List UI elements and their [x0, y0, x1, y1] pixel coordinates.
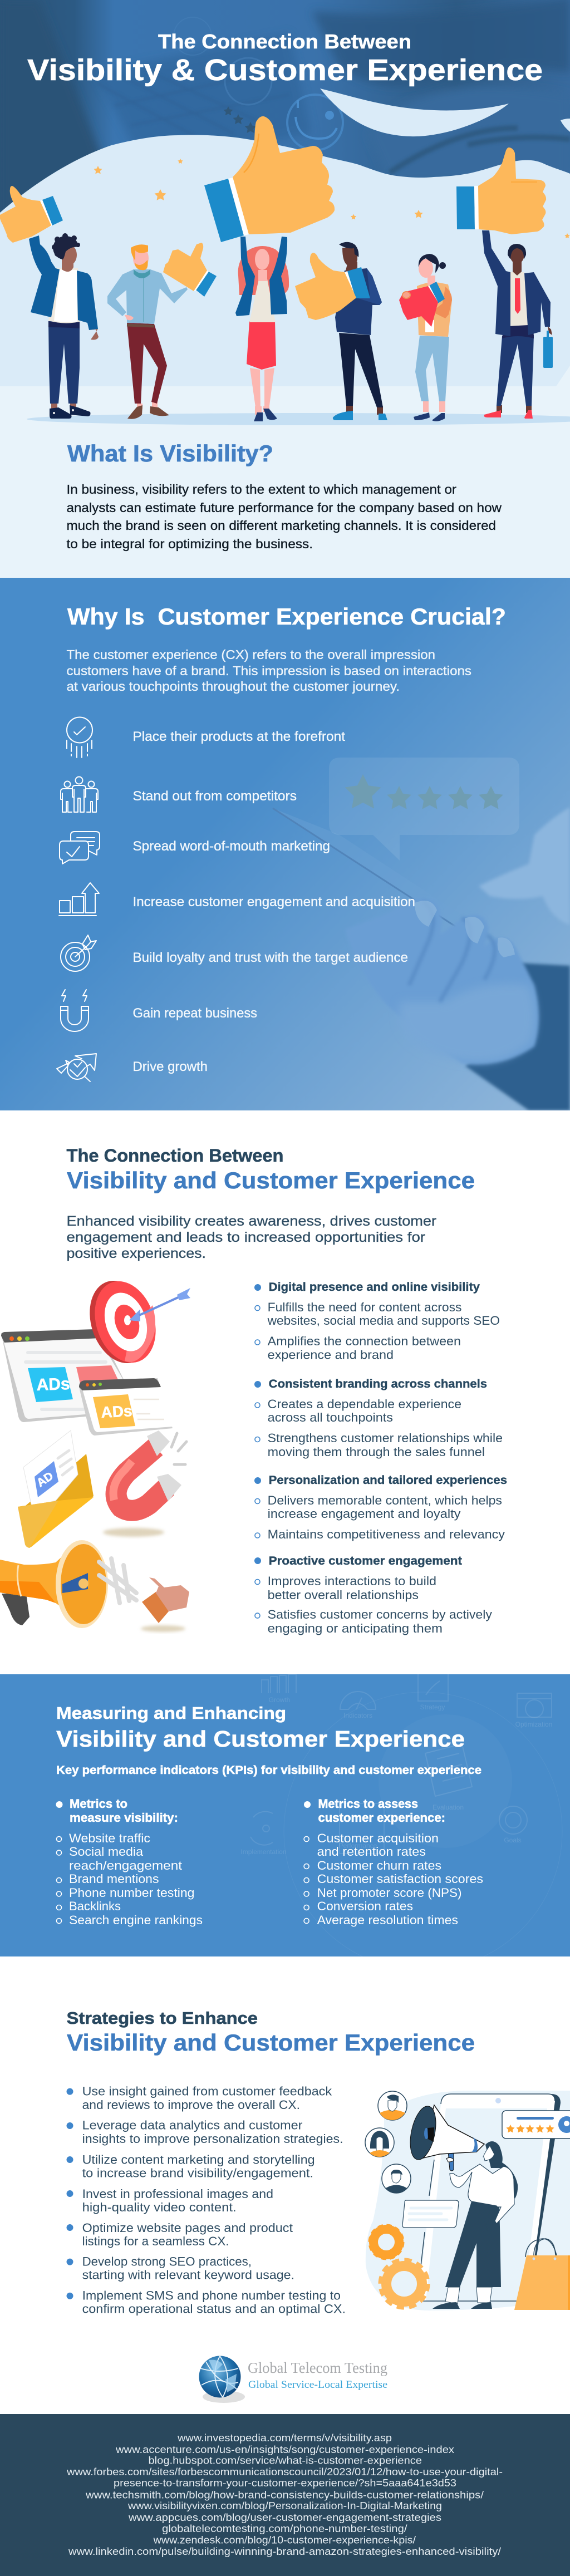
megaphone [406, 2104, 484, 2171]
panel: sources footer: www.investopedia.com/terms/v/visibility.asp [177, 2432, 392, 2444]
heading: connection: The Connection Between [67, 1146, 283, 1166]
faint background icons: Optimization [515, 1720, 552, 1728]
floor [0, 366, 570, 578]
panel: why customer experience is crucial [0, 578, 570, 1110]
faint background icons: Growth [269, 1696, 290, 1704]
person 1 with thumb up [0, 186, 99, 419]
icon: growth bars [59, 883, 99, 916]
light wave backdrop [0, 135, 570, 386]
small browser window with ad [79, 1378, 173, 1436]
text: engagement: Increase customer engagement and acquisition [132, 894, 415, 910]
heading: what is visibility: What Is Visibility? [67, 440, 273, 466]
light swoosh [320, 89, 509, 136]
text: drive growth: Drive growth [132, 1059, 208, 1074]
small browser window with ad: ADs [101, 1402, 132, 1421]
illustration: woman with megaphone and phone [365, 2091, 570, 2310]
text: loyalty: Build loyalty and trust with the target audience [132, 950, 408, 965]
list: metrics to measure visibility: Search engine rankings [69, 1913, 203, 1927]
woman [433, 2141, 518, 2309]
heading: strategies: Visibility and Customer Experience [67, 2029, 475, 2056]
list: metrics to assess customer experience: Conversion rates [317, 1899, 413, 1913]
list: metrics to assess customer experience: Customer churn rates [317, 1859, 441, 1872]
faint background icons: Evaluation [433, 1803, 464, 1811]
list: digital presence [254, 1281, 500, 1361]
list: consistent branding [254, 1378, 503, 1459]
person 5 with thumb down [399, 254, 452, 421]
list: strategies: starting with relevant keyword usage. [82, 2268, 294, 2282]
text block: visibility definition: much the brand is seen on different marketing channels. It is considered [67, 518, 496, 533]
panel: sources footer: www.visibilityvixen.com/blog/Personalization-In-Digital-Marketing [127, 2500, 442, 2511]
list: metrics to measure visibility: Phone number testing [69, 1886, 195, 1900]
background photo: hand holding phone [273, 807, 570, 1110]
faint background icons: Goals [504, 1836, 522, 1844]
list: personalization: Maintains competitiveness and relevancy [268, 1527, 505, 1541]
stars [94, 159, 570, 238]
panel: connection between visibility and customer experience [0, 1110, 570, 1674]
list: digital presence: Amplifies the connection between [268, 1334, 461, 1348]
list: proactive engagement: Improves interactions to build [268, 1574, 436, 1588]
panel: header and what is visibility [0, 0, 570, 578]
list: strategies: to increase brand visibility/engagement. [82, 2166, 313, 2180]
logo: global telecom testing: Global Telecom Testing [248, 2359, 387, 2376]
text block: customer experience definition: at various touchpoints throughout the customer journey. [67, 679, 400, 694]
faint background icons: Strategy [420, 1703, 445, 1711]
icon: speech bubbles [60, 832, 100, 864]
list: strategies: insights to improve personalization strategies. [82, 2132, 343, 2146]
icon: target with arrow [61, 935, 96, 971]
faint background icons: Indicators [343, 1712, 372, 1719]
title: Visibility & Customer Experience [27, 53, 543, 87]
list: metrics to measure visibility: Social media [69, 1845, 144, 1859]
small swoosh at right [561, 119, 570, 132]
list: strategies [67, 2084, 346, 2316]
panel: sources footer: www.accenture.com/us-en/insights/song/customer-experience-index [115, 2444, 454, 2455]
text block: visibility definition: In business, visibility refers to the extent to which management or [67, 482, 456, 496]
list: strategies: Invest in professional images and [82, 2187, 273, 2201]
panel: sources footer: www.forbes.com/sites/forbescommunicationscouncil/2023/01/12/how-to-use-your-digital- [66, 2466, 503, 2477]
list: proactive engagement: Proactive customer engagement [269, 1555, 462, 1567]
heading: measuring [56, 1703, 465, 1752]
icon: three people [61, 777, 98, 812]
list: strategies: Implement SMS and phone number testing to [82, 2289, 341, 2303]
panel: sources footer: blog.hubspot.com/service/what-is-customer-experience [148, 2455, 422, 2466]
logo: global telecom testing: Global Service-Local Expertise [248, 2379, 387, 2391]
panel: sources footer: www.linkedin.com/pulse/building-winning-brand-amazon-strategies-enhanced-visibility/ [68, 2546, 501, 2557]
text block: connection intro: positive experiences. [67, 1246, 206, 1261]
list: consistent branding: Consistent branding across channels [269, 1378, 487, 1390]
list: strategies: and reviews to improve the overall CX. [82, 2098, 300, 2112]
person 6 with thumb up and briefcase [456, 148, 553, 419]
list: strategies: Develop strong SEO practices, [82, 2254, 252, 2269]
faint background icons: Implementation [240, 1848, 287, 1856]
customer avatars [365, 2091, 411, 2193]
list: metrics to measure visibility: measure visibility: [70, 1811, 178, 1825]
heading: strategies: Strategies to Enhance [67, 2008, 258, 2028]
text: KPI subheading: Key performance indicators (KPIs) for visibility and customer experience [56, 1764, 481, 1777]
background photo: keyboard and hand [0, 0, 570, 267]
heading: connection: Visibility and Customer Experience [67, 1167, 475, 1193]
panel: sources footer: www.appcues.com/blog/user-customer-engagement-strategies [128, 2512, 441, 2523]
heading: measuring: Measuring and Enhancing [56, 1703, 286, 1723]
text block: connection intro: Enhanced visibility creates awareness, drives customer [67, 1213, 436, 1229]
text block: connection intro: engagement and leads to increased opportunities for [67, 1230, 425, 1245]
panel: sources footer: www.techsmith.com/blog/how-brand-consistency-builds-customer-relationships/ [85, 2489, 484, 2500]
text: stand out: Stand out from competitors [132, 789, 297, 804]
list: digital presence: websites, social media and supports SEO [267, 1314, 500, 1328]
text: word of mouth: Spread word-of-mouth marketing [132, 839, 330, 854]
list: strategies: listings for a seamless CX. [82, 2234, 229, 2248]
list: metrics to assess customer experience: Metrics to assess [318, 1797, 418, 1811]
ground shadow [27, 413, 570, 425]
heading: connection [67, 1146, 475, 1193]
browser window with ads [1, 1329, 128, 1422]
list: metrics to assess customer experience: Net promoter score (NPS) [317, 1886, 462, 1900]
list: digital presence: Fulfills the need for content across [268, 1300, 462, 1314]
list: proactive engagement [254, 1555, 492, 1635]
list: proactive engagement: better overall relationships [268, 1588, 419, 1602]
text block: customer experience definition: The customer experience (CX) refers to the overall impression [67, 647, 435, 662]
list: metrics to assess customer experience: Customer satisfaction scores [317, 1872, 483, 1886]
list: consistent branding: Strengthens customer relationships while [268, 1431, 503, 1445]
list: digital presence: Digital presence and online visibility [269, 1281, 480, 1294]
list: metrics to assess customer experience: customer experience: [318, 1811, 445, 1825]
review bubble with stars [329, 758, 519, 861]
icon: growth with magnifier [57, 1054, 96, 1081]
rating card [502, 2111, 570, 2139]
text: place products: Place their products at the forefront [132, 729, 345, 744]
megaphone with hash [0, 1540, 136, 1628]
heading: measuring: Visibility and Customer Experience [56, 1726, 465, 1752]
list: strategies: Optimize website pages and product [82, 2221, 293, 2235]
title: The Connection Between [158, 30, 411, 53]
panel: strategies to enhance [0, 1956, 570, 2414]
person 3 holding big thumb [204, 116, 335, 421]
text block: visibility definition: analysts can estimate future performance for the company based on how [67, 500, 502, 515]
list: metrics to measure visibility: Backlinks [69, 1899, 121, 1913]
panel: sources footer [0, 2414, 570, 2576]
list: strategies: Utilize content marketing and storytelling [82, 2153, 315, 2167]
browser window with ads: ADs [36, 1375, 70, 1394]
text block: visibility definition [67, 482, 502, 551]
list: personalization: Delivers memorable content, which helps [268, 1493, 502, 1507]
note card [402, 2200, 459, 2228]
list: metrics to measure visibility: Metrics to [70, 1797, 127, 1811]
heading: why customer experience: Why Is Customer Experience Crucial? [67, 603, 506, 630]
faint background icons: Performance [339, 1842, 377, 1850]
icon: check with speed lines [67, 717, 92, 758]
list: digital presence: experience and brand [268, 1348, 394, 1361]
list: metrics to measure visibility [56, 1797, 203, 1927]
list: proactive engagement: engaging or anticipating them [268, 1621, 443, 1635]
panel: measuring and enhancing [0, 1674, 570, 1970]
panel: sources footer: globaltelecomtesting.com/phone-number-testing/ [162, 2523, 407, 2534]
icon: magnet [61, 990, 89, 1031]
faint background icons [240, 1674, 562, 1970]
list: consistent branding: Creates a dependable experience [268, 1397, 461, 1411]
panel: sources footer: presence-to-transform-your-customer-experience/?sh=5aaa641e3d53 [114, 2477, 456, 2489]
list: metrics to measure visibility: Brand mentions [69, 1872, 159, 1886]
person 4 with thumb up [295, 242, 387, 420]
logo: global telecom testing [199, 2356, 387, 2403]
text block: connection intro [67, 1213, 436, 1261]
list: metrics to measure visibility: reach/engagement [69, 1859, 182, 1872]
title [27, 30, 543, 87]
list: personalization [254, 1474, 507, 1541]
heading: strategies [67, 2008, 475, 2056]
list: metrics to assess customer experience: Customer acquisition [317, 1831, 439, 1845]
list: metrics to assess customer experience: Average resolution times [317, 1913, 458, 1927]
text block: customer experience definition: customers have of a brand. This impression is based on interactions [67, 663, 471, 678]
magnet [103, 1430, 186, 1537]
list: personalization: Personalization and tailored experiences [269, 1474, 507, 1487]
text block: customer experience definition [67, 647, 471, 694]
list: strategies: high-quality video content. [82, 2200, 237, 2214]
target with arrow [80, 1273, 190, 1371]
phone [418, 2094, 561, 2301]
list: strategies: Use insight gained from customer feedback [82, 2084, 332, 2098]
list: consistent branding: across all touchpoints [268, 1410, 393, 1424]
list: personalization: increase engagement and loyalty [268, 1507, 461, 1521]
list: metrics to assess customer experience [304, 1797, 483, 1927]
panel: sources footer: www.zendesk.com/blog/10-customer-experience-kpis/ [153, 2535, 416, 2546]
illustration: digital marketing objects [0, 1273, 190, 1632]
gears [370, 2226, 428, 2307]
list: metrics to measure visibility: Website traffic [69, 1831, 150, 1845]
list: proactive engagement: Satisfies customer concerns by actively [268, 1607, 492, 1621]
list: consistent branding: moving them through the sales funnel [268, 1445, 485, 1459]
text: repeat business: Gain repeat business [132, 1006, 257, 1021]
text block: visibility definition: to be integral for optimizing the business. [67, 537, 313, 551]
shopping bag [514, 2239, 570, 2310]
envelope with ad letter [18, 1430, 94, 1548]
list: strategies: Leverage data analytics and customer [82, 2118, 303, 2132]
list: strategies: confirm operational status and an optimal CX. [82, 2302, 346, 2316]
person 2 with thumb up [107, 243, 217, 419]
envelope with ad letter: AD [35, 1469, 56, 1489]
list: metrics to assess customer experience: and retention rates [317, 1845, 426, 1859]
3d thumbs up [141, 1577, 189, 1632]
